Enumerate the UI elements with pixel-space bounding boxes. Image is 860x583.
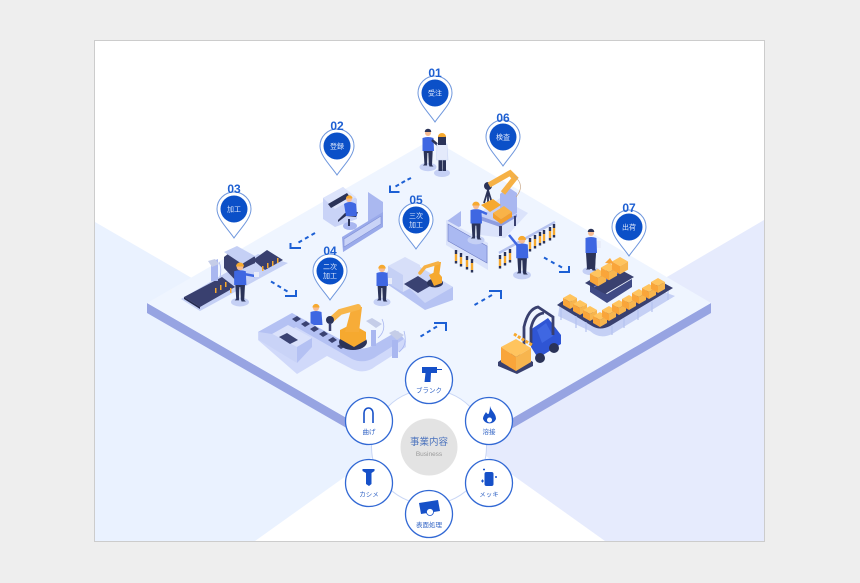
pin 05: 05 bbox=[409, 193, 423, 207]
business services ring bbox=[346, 356, 512, 538]
central hub bbox=[400, 418, 458, 476]
flow arrow 05 to 06 bbox=[474, 291, 501, 305]
pin 05 bbox=[399, 193, 433, 249]
machine base bbox=[387, 262, 453, 310]
scene 05: tertiary processing machine bbox=[374, 257, 453, 310]
machine housing bbox=[388, 257, 420, 292]
node: caulking bbox=[346, 460, 392, 506]
wheels bbox=[535, 353, 545, 363]
partition wall bbox=[447, 211, 461, 233]
scene 03: machining line bbox=[181, 246, 288, 311]
pin 07: 出荷 bbox=[622, 222, 636, 232]
flow arrow 03 to 04 bbox=[271, 282, 296, 296]
node: surface treatment bbox=[406, 490, 452, 538]
pin 04: 二次 bbox=[323, 262, 337, 271]
node: plating bbox=[466, 460, 512, 506]
cabinet bbox=[500, 187, 517, 217]
node: bending: 曲げ bbox=[362, 427, 376, 436]
worker with raised arm bbox=[509, 235, 531, 279]
flow arrow 02 to 03 bbox=[290, 233, 315, 248]
right inspection rail bbox=[499, 222, 555, 268]
isometric platform bbox=[147, 139, 711, 476]
conveyor base bbox=[258, 313, 406, 374]
node: surface treatment: 表面処理 bbox=[416, 520, 442, 529]
pin 07: 07 bbox=[622, 201, 636, 215]
control posts bbox=[366, 318, 405, 358]
white panel bbox=[94, 40, 764, 542]
scene 01: order handshake bbox=[420, 129, 450, 177]
pin 02: 02 bbox=[330, 119, 344, 133]
pin 04 bbox=[313, 244, 347, 300]
pin 07 bbox=[612, 201, 646, 256]
worker bbox=[231, 262, 259, 306]
man bbox=[420, 129, 439, 171]
robot arm bbox=[420, 262, 443, 288]
pin 04: 加工 bbox=[323, 271, 337, 280]
scene 07: shipping bbox=[557, 229, 675, 336]
scene 06: inspection bbox=[446, 173, 555, 279]
pin 03: 03 bbox=[227, 182, 241, 196]
scene 04: secondary processing conveyor bbox=[258, 304, 406, 374]
node: welding bbox=[466, 398, 512, 444]
pin 05: 三次 bbox=[409, 211, 423, 220]
roller conveyor shadow bbox=[558, 292, 675, 336]
mast and cage bbox=[524, 307, 553, 345]
worker bbox=[374, 265, 392, 306]
seated operator bbox=[338, 195, 358, 230]
pin 03 bbox=[217, 182, 251, 238]
hazard bar bbox=[514, 334, 532, 345]
robot arm bbox=[484, 173, 521, 203]
flow arrow 04 to 05 bbox=[420, 323, 446, 336]
pin 06: 06 bbox=[496, 111, 510, 125]
flow arrow 01 to 02 bbox=[390, 178, 411, 192]
woman bbox=[434, 133, 450, 177]
node: plating: メッキ bbox=[479, 492, 499, 498]
robot arm bbox=[326, 306, 367, 350]
conveyor legs bbox=[561, 291, 668, 335]
left dark conveyor bbox=[184, 277, 235, 307]
worker behind belt bbox=[310, 304, 322, 325]
pin 05: 加工 bbox=[409, 220, 423, 229]
background floor shapes bbox=[95, 220, 764, 541]
node: blank: ブランク bbox=[416, 386, 442, 394]
partition wall bbox=[343, 192, 383, 252]
roller conveyor bbox=[557, 282, 673, 328]
worker with tablet bbox=[582, 229, 601, 275]
right dark conveyor bbox=[253, 250, 283, 270]
boxes on table bbox=[590, 257, 628, 286]
node: caulking: カシメ bbox=[359, 490, 379, 498]
pin 01: 01 bbox=[428, 66, 442, 80]
table shadow bbox=[470, 198, 528, 238]
packing table bbox=[590, 279, 632, 303]
centre housing bbox=[224, 247, 255, 282]
boxes on conveyor bbox=[563, 278, 665, 327]
truck body bbox=[530, 318, 561, 358]
pallet bbox=[498, 351, 533, 374]
scene 02: registration operator station bbox=[323, 187, 383, 252]
end block bbox=[272, 325, 312, 347]
central hub: 事業内容 bbox=[410, 436, 448, 448]
control desk bbox=[323, 187, 357, 227]
inspection table bbox=[480, 203, 517, 223]
left inspection rods bbox=[455, 250, 473, 272]
stacked boxes bbox=[501, 339, 531, 357]
pin 01 bbox=[418, 66, 452, 122]
node: blank bbox=[406, 356, 452, 404]
pin 04: 04 bbox=[323, 244, 337, 258]
ring disc bbox=[372, 390, 486, 504]
parts on belt bbox=[292, 316, 346, 349]
machine floor shadow bbox=[181, 254, 288, 311]
flow arrow 06 to 07 bbox=[544, 258, 569, 272]
controller bbox=[211, 259, 218, 281]
central hub: Business bbox=[416, 451, 443, 458]
parts and box bbox=[481, 199, 501, 212]
pin 01: 受注 bbox=[428, 88, 442, 98]
pin 02: 登録 bbox=[330, 142, 344, 150]
pin 03: 加工 bbox=[227, 204, 241, 214]
node: welding: 溶接 bbox=[482, 427, 496, 436]
node: bending bbox=[346, 398, 392, 444]
pin 02 bbox=[320, 119, 354, 175]
pin 06: 検査 bbox=[496, 132, 510, 142]
worker at partition bbox=[468, 202, 487, 244]
forklift with pallet bbox=[498, 307, 561, 374]
pin 06 bbox=[486, 111, 520, 166]
